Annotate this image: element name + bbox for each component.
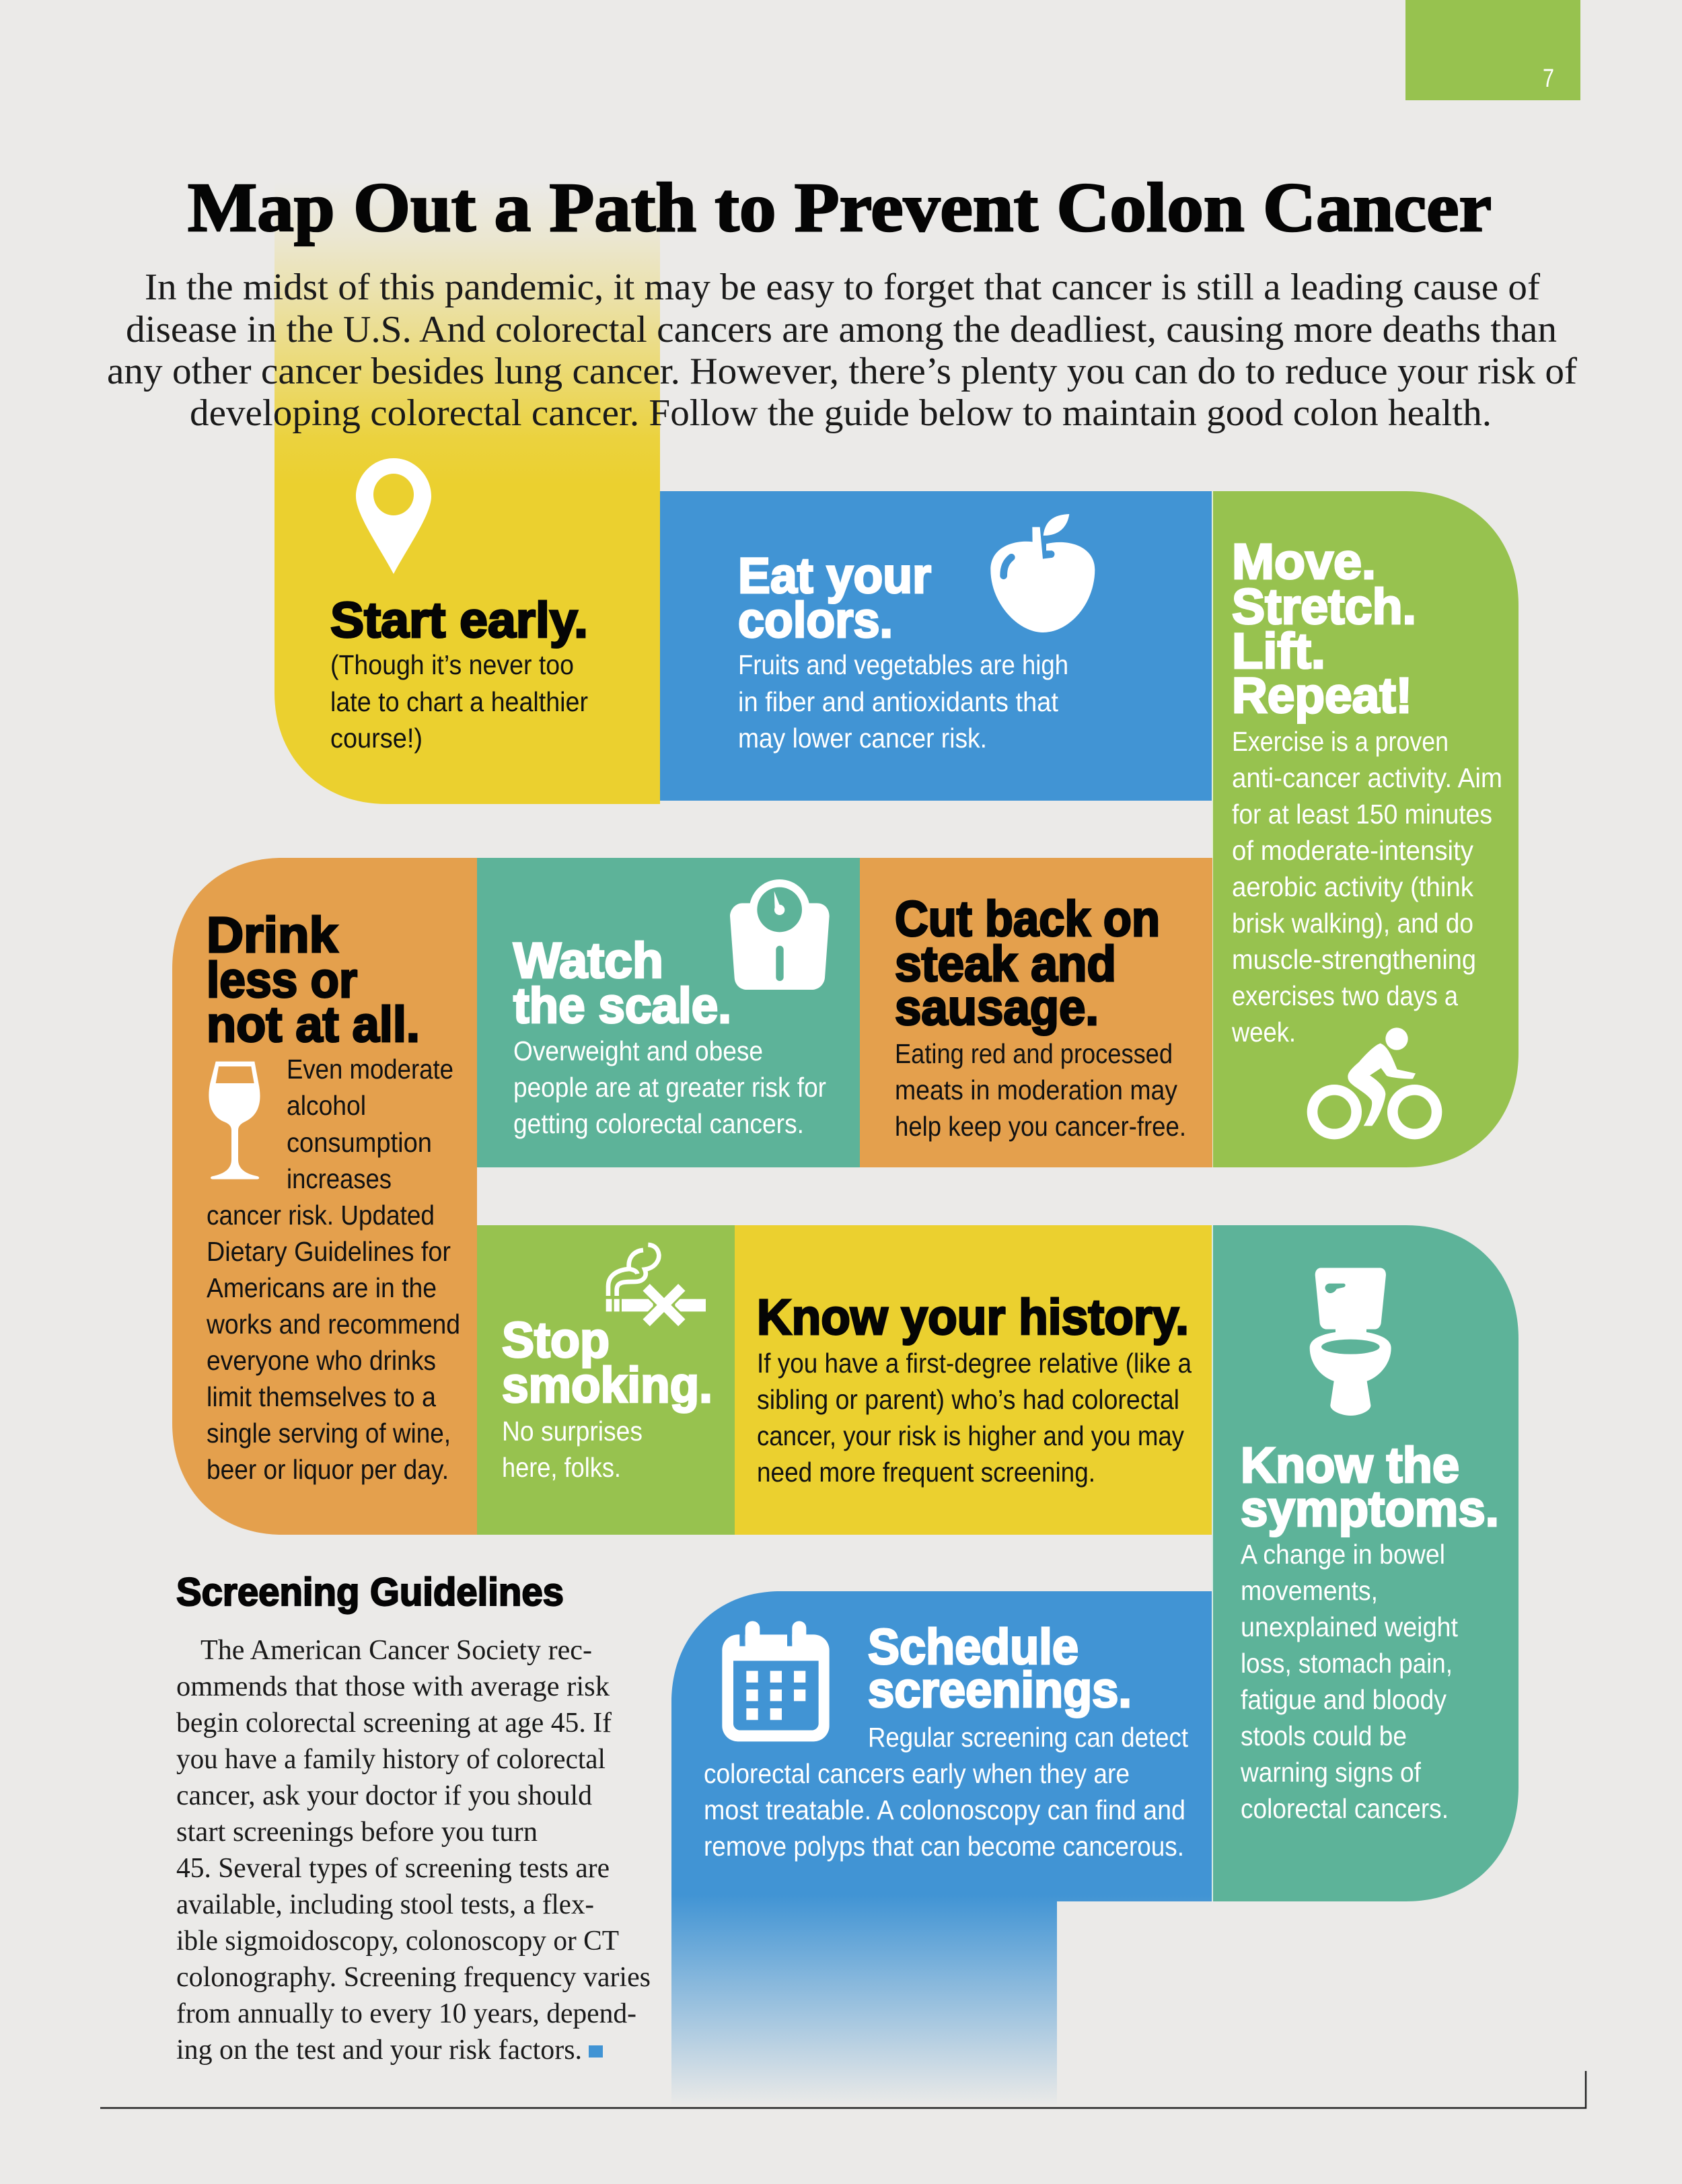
heading: know your history: Know your history. — [757, 1289, 1189, 1345]
text: stop smoking body — [502, 1416, 643, 1483]
text: exercise body: anti-cancer activity. Aim — [1232, 762, 1502, 793]
text: know your history body — [757, 1348, 1192, 1488]
text: symptoms body: stools could be — [1241, 1720, 1407, 1751]
panel: move stretch lift repeat — [1212, 491, 1519, 1167]
text: symptoms body: warning signs of — [1240, 1757, 1422, 1788]
text: drink less body: consumption — [287, 1127, 432, 1158]
heading: drink less: not at all. — [207, 996, 420, 1052]
panel: cut back on steak — [860, 858, 1212, 1167]
heading: eat your colors: colors. — [738, 592, 893, 648]
intro paragraph: disease in the U.S. And colorectal cancers are among the deadliest, causing more deaths than — [126, 309, 1557, 351]
text: cut back body: Eating red and processed — [895, 1038, 1173, 1069]
intro paragraph: In the midst of this pandemic, it may be easy to forget that cancer is still a leading cause of — [145, 266, 1540, 308]
text: symptoms body: loss, stomach pain, — [1241, 1648, 1453, 1679]
text: exercise body: of moderate-intensity — [1232, 835, 1473, 866]
icon: no smoking — [606, 1245, 706, 1323]
text: exercise body: for at least 150 minutes — [1232, 799, 1492, 830]
text: symptoms body: A change in bowel — [1241, 1539, 1445, 1570]
heading: cut back on steak: steak and — [895, 936, 1116, 992]
text: start early body: late to chart a healthier — [330, 686, 588, 717]
text: watch the scale body: getting colorectal cancers. — [513, 1108, 804, 1139]
text: schedule body: remove polyps that can become cancerous. — [704, 1831, 1184, 1862]
text: watch the scale body: people are at greater risk for — [513, 1072, 826, 1103]
text: screening guidelines body: available, including stool tests, a flex- — [176, 1889, 594, 1920]
text: stop smoking body: here, folks. — [502, 1452, 621, 1483]
text: cut back body: meats in moderation may — [895, 1075, 1177, 1105]
intro paragraph: developing colorectal cancer. Follow the guide below to maintain good colon health. — [190, 392, 1492, 434]
text: exercise body: exercises two days a — [1232, 980, 1458, 1011]
text: screening guidelines body — [176, 1635, 651, 2066]
icon: cyclist — [1312, 1027, 1436, 1134]
text: screening guidelines body: colonography. Screening frequency varies — [176, 1962, 651, 1993]
panel: watch the scale — [477, 858, 860, 1167]
text: symptoms body: movements, — [1241, 1575, 1378, 1606]
end mark square — [589, 2045, 603, 2058]
text: drink less body: cancer risk. Updated — [207, 1200, 435, 1231]
heading: schedule screenings — [868, 1619, 1132, 1718]
panel: know your history — [735, 1225, 1212, 1535]
heading: eat your colors: Eat your — [738, 548, 931, 604]
text: screening guidelines body: you have a family history of colorectal — [176, 1744, 606, 1775]
text: know your history body: cancer, your risk is higher and you may — [757, 1420, 1184, 1451]
text: start early body — [330, 649, 588, 754]
text: drink less body: everyone who drinks — [207, 1345, 436, 1376]
icon: calendar — [722, 1621, 830, 1741]
text: exercise body — [1231, 726, 1502, 1048]
text: screening guidelines body: from annually to every 10 years, depend- — [176, 1998, 636, 2029]
panel: stop smoking — [477, 1225, 735, 1535]
heading: move stretch lift repeat: Stretch. — [1232, 579, 1416, 634]
heading: drink less: Drink — [207, 907, 338, 963]
text: exercise body: week. — [1231, 1017, 1296, 1048]
text: eat your colors body: in fiber and antioxidants that — [738, 686, 1059, 717]
text: start early body: course!) — [330, 723, 423, 754]
heading: watch the scale: Watch — [513, 933, 663, 988]
heading: know the symptoms — [1241, 1437, 1499, 1537]
icon: bathroom scale — [730, 879, 830, 990]
heading: cut back on steak — [895, 891, 1160, 1035]
page number tab: 7 — [1543, 65, 1554, 93]
icon: apple — [990, 514, 1095, 632]
text: symptoms body: colorectal cancers. — [1241, 1793, 1449, 1824]
heading: drink less — [207, 907, 420, 1052]
title: Map Out a Path to Prevent Colon Cancer — [188, 169, 1492, 246]
text: drink less body: Dietary Guidelines for — [207, 1236, 451, 1267]
icon: wine glass — [209, 1062, 260, 1179]
panel: know the symptoms — [1212, 1225, 1519, 1901]
intro paragraph — [107, 266, 1577, 434]
text: symptoms body: fatigue and bloody — [1241, 1684, 1447, 1715]
heading: watch the scale: the scale. — [513, 978, 731, 1033]
heading: schedule screenings: Schedule — [868, 1619, 1078, 1675]
text: schedule body: Regular screening can detect — [868, 1722, 1189, 1753]
text: drink less body: increases — [287, 1163, 392, 1194]
text: drink less body: single serving of wine, — [207, 1418, 451, 1449]
heading: stop smoking — [502, 1312, 712, 1413]
panel: schedule screenings — [671, 1591, 1212, 2106]
panel: drink less — [172, 858, 477, 1535]
text: exercise body: brisk walking), and do — [1232, 908, 1473, 939]
text: know your history body: need more frequent screening. — [757, 1457, 1095, 1488]
text: know your history body: If you have a first-degree relative (like a — [757, 1348, 1192, 1379]
heading: schedule screenings: screenings. — [868, 1662, 1132, 1718]
text: symptoms body: unexplained weight — [1241, 1611, 1459, 1642]
intro paragraph: any other cancer besides lung cancer. However, there’s plenty you can do to reduce your risk of — [107, 351, 1577, 392]
heading: know the symptoms: symptoms. — [1241, 1481, 1499, 1537]
page number tab — [1405, 0, 1580, 100]
text: drink less body: limit themselves to a — [207, 1381, 436, 1412]
panel: eat your colors — [660, 491, 1212, 801]
heading: watch the scale — [513, 933, 731, 1033]
text: start early body: (Though it’s never too — [330, 649, 574, 680]
icon: toilet — [1310, 1268, 1391, 1416]
heading: move stretch lift repeat: Lift. — [1232, 623, 1325, 679]
text: screening guidelines body: The American Cancer Society rec- — [200, 1635, 592, 1666]
text: drink less body: works and recommend — [206, 1309, 460, 1340]
heading: screening guidelines: Screening Guidelines — [176, 1570, 564, 1614]
heading: start early: Start early. — [330, 592, 588, 648]
text: screening guidelines body: 45. Several types of screening tests are — [176, 1853, 610, 1884]
text: drink less body: alcohol — [287, 1090, 366, 1121]
heading: move stretch lift repeat — [1232, 534, 1416, 723]
text: schedule body: most treatable. A colonoscopy can find and — [704, 1794, 1185, 1825]
text: screening guidelines body: start screenings before you turn — [176, 1817, 538, 1848]
text: schedule body — [704, 1722, 1189, 1862]
text: screening guidelines body: ommends that those with average risk — [176, 1671, 610, 1702]
text: know your history body: sibling or parent) who’s had colorectal — [757, 1384, 1179, 1415]
text: exercise body: Exercise is a proven — [1232, 726, 1449, 757]
heading: move stretch lift repeat: Move. — [1232, 534, 1376, 589]
heading: cut back on steak: sausage. — [895, 980, 1099, 1035]
heading: know the symptoms: Know the — [1241, 1437, 1459, 1493]
sidebar: screening guidelines — [176, 1570, 651, 2066]
heading: cut back on steak: Cut back on — [895, 891, 1160, 947]
text: exercise body: aerobic activity (think — [1232, 871, 1473, 902]
text: schedule body: colorectal cancers early when they are — [704, 1758, 1130, 1789]
text: exercise body: muscle-strengthening — [1232, 944, 1476, 975]
heading: stop smoking: Stop — [502, 1312, 610, 1368]
text: stop smoking body: No surprises — [502, 1416, 643, 1447]
text: screening guidelines body: begin colorectal screening at age 45. If — [176, 1708, 612, 1739]
text: watch the scale body: Overweight and obese — [513, 1035, 763, 1066]
text: drink less body: beer or liquor per day. — [207, 1454, 449, 1485]
text: drink less body — [206, 1054, 460, 1485]
text: eat your colors body: Fruits and vegetables are high — [738, 649, 1068, 680]
text: symptoms body — [1240, 1539, 1459, 1824]
heading: move stretch lift repeat: Repeat! — [1232, 667, 1412, 723]
text: eat your colors body: may lower cancer risk. — [738, 723, 987, 754]
text: eat your colors body — [738, 649, 1068, 754]
text: cut back body — [895, 1038, 1186, 1142]
text: screening guidelines body: ible sigmoidoscopy, colonoscopy or CT — [176, 1926, 619, 1957]
heading: eat your colors — [738, 548, 931, 648]
icon: map pin — [356, 458, 431, 574]
panel: start early — [275, 182, 660, 804]
text: watch the scale body — [513, 1035, 826, 1139]
text: drink less body: Even moderate — [287, 1054, 453, 1085]
text: cut back body: help keep you cancer-free. — [895, 1111, 1186, 1142]
text: screening guidelines body: ing on the test and your risk factors. — [176, 2035, 582, 2066]
heading: drink less: less or — [207, 952, 357, 1008]
heading: stop smoking: smoking. — [502, 1357, 712, 1413]
text: screening guidelines body: cancer, ask your doctor if you should — [176, 1780, 592, 1811]
text: drink less body: Americans are in the — [207, 1272, 437, 1303]
